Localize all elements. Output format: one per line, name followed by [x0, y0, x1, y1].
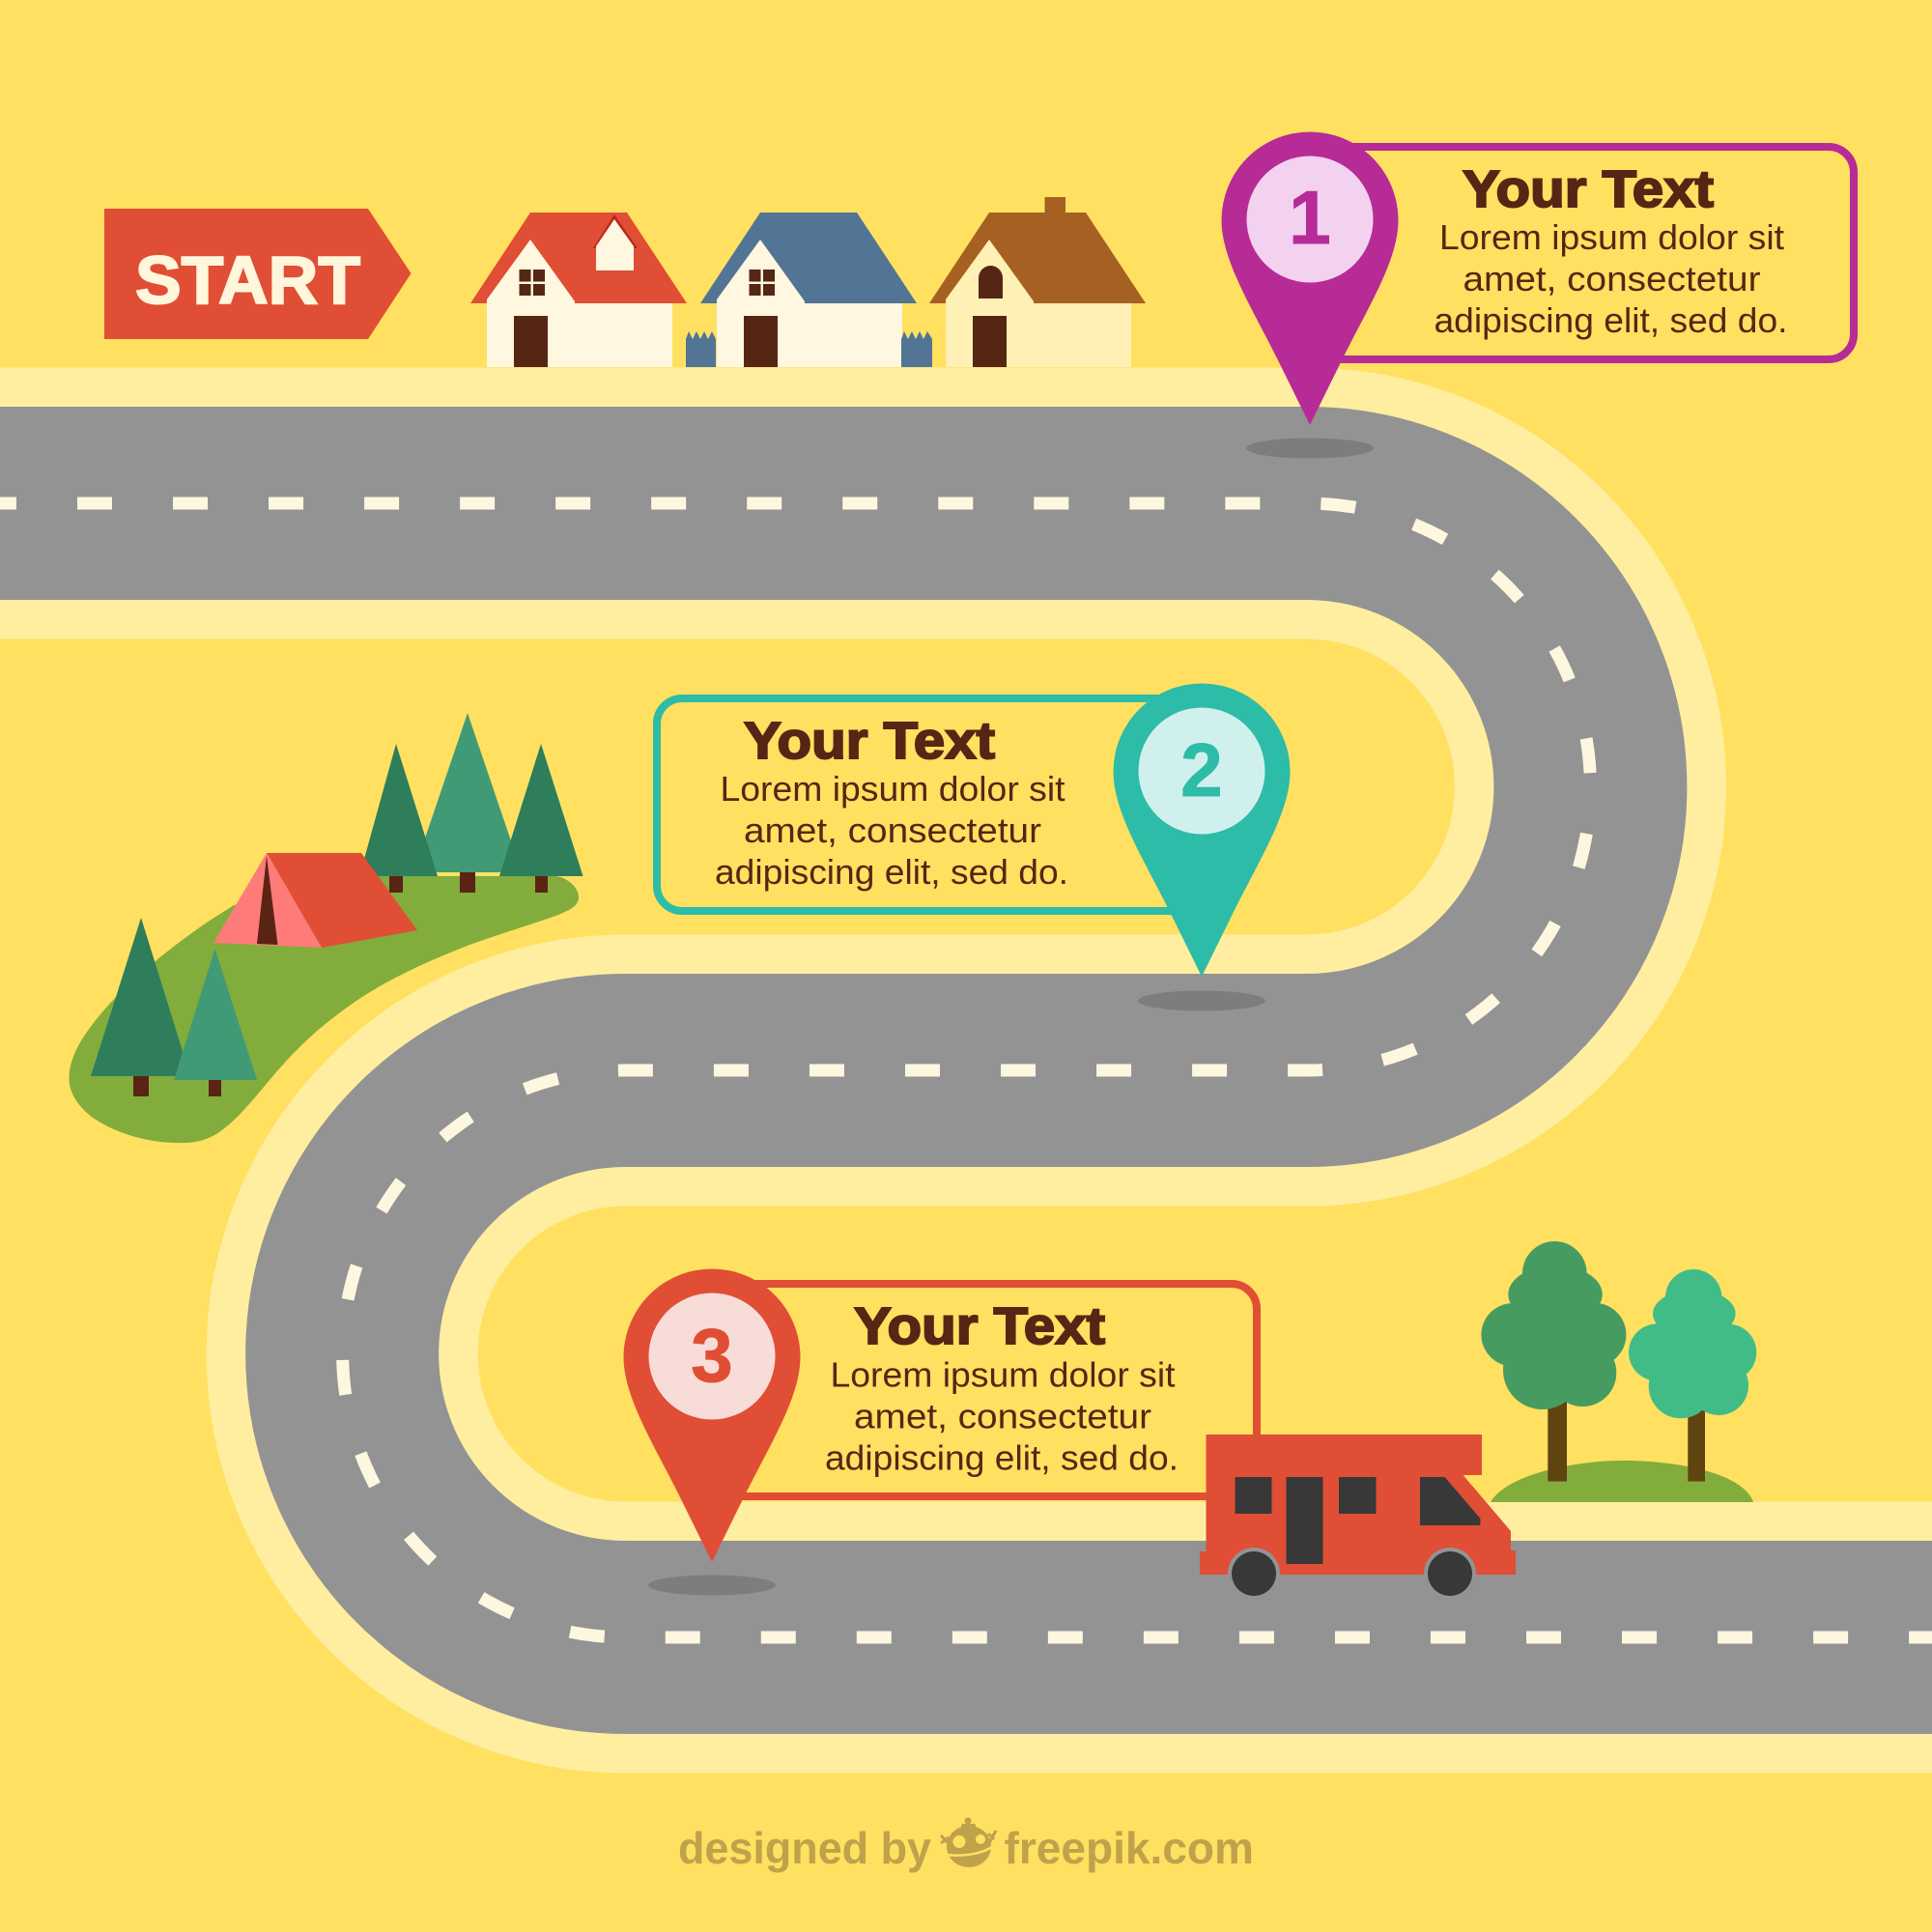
camper van [1200, 1435, 1516, 1600]
body text 1: amet, consectetur [1463, 259, 1761, 298]
body text 3: adipiscing elit, sed do. [825, 1437, 1179, 1478]
winding road [0, 503, 1932, 1637]
pin number 1: 1 [1289, 175, 1331, 260]
panel: step 1 callout [1221, 131, 1854, 458]
pine trees in front [91, 918, 257, 1096]
body text 1 [1434, 217, 1787, 340]
callout box 2 [657, 698, 1203, 911]
heading 2: Your Text [744, 712, 995, 770]
pin number 2 [1138, 707, 1265, 835]
tent [213, 853, 417, 948]
body text 1: Lorem ipsum dolor sit [1439, 217, 1784, 257]
body text 3: amet, consectetur [854, 1397, 1151, 1435]
tree: light green [1629, 1269, 1756, 1482]
watermark: designed by [678, 1823, 931, 1873]
heading 3: Your Text [854, 1297, 1105, 1355]
watermark [678, 1818, 1254, 1873]
house: red roof [470, 213, 687, 367]
pin 2 [1113, 683, 1291, 977]
house: blue roof [700, 213, 917, 367]
callout box 1 [1299, 147, 1854, 359]
panel: step 2 callout [657, 683, 1291, 1010]
pin shadow 1 [1246, 439, 1374, 458]
pin number 2: 2 [1180, 727, 1223, 812]
wheel: rear [1228, 1548, 1280, 1600]
body text 2: Lorem ipsum dolor sit [721, 769, 1065, 809]
start sign [104, 209, 412, 339]
fence: right [901, 331, 932, 367]
watermark: freepik.com [1005, 1823, 1254, 1873]
pin 3 [624, 1269, 800, 1562]
pine trees behind tent [361, 713, 583, 893]
body text 1: adipiscing elit, sed do. [1434, 300, 1787, 340]
campsite scene [69, 713, 582, 1143]
body text 2: amet, consectetur [744, 810, 1041, 850]
icon: freepik robot [941, 1818, 996, 1867]
body text 2 [715, 769, 1068, 892]
body text 3: Lorem ipsum dolor sit [831, 1354, 1175, 1395]
roadside trees [1481, 1241, 1756, 1502]
heading 1: Your Text [1463, 160, 1714, 218]
pin number 3: 3 [691, 1313, 733, 1398]
body text 3 [825, 1354, 1179, 1478]
pin number 1 [1246, 156, 1374, 282]
pin number 3 [649, 1293, 775, 1420]
start sign: START [135, 242, 360, 318]
tree: dark green [1481, 1241, 1626, 1482]
pin 1 [1221, 131, 1399, 425]
panel: step 3 callout [624, 1269, 1257, 1596]
body text 2: adipiscing elit, sed do. [715, 852, 1068, 892]
house: brown roof [929, 197, 1146, 367]
pin shadow 2 [1138, 991, 1265, 1010]
green hill [69, 876, 579, 1143]
wheel: front [1424, 1548, 1476, 1600]
callout box 3 [712, 1284, 1257, 1496]
fence: left [686, 331, 716, 367]
grass mound [1491, 1461, 1753, 1502]
pin shadow 3 [648, 1575, 776, 1596]
